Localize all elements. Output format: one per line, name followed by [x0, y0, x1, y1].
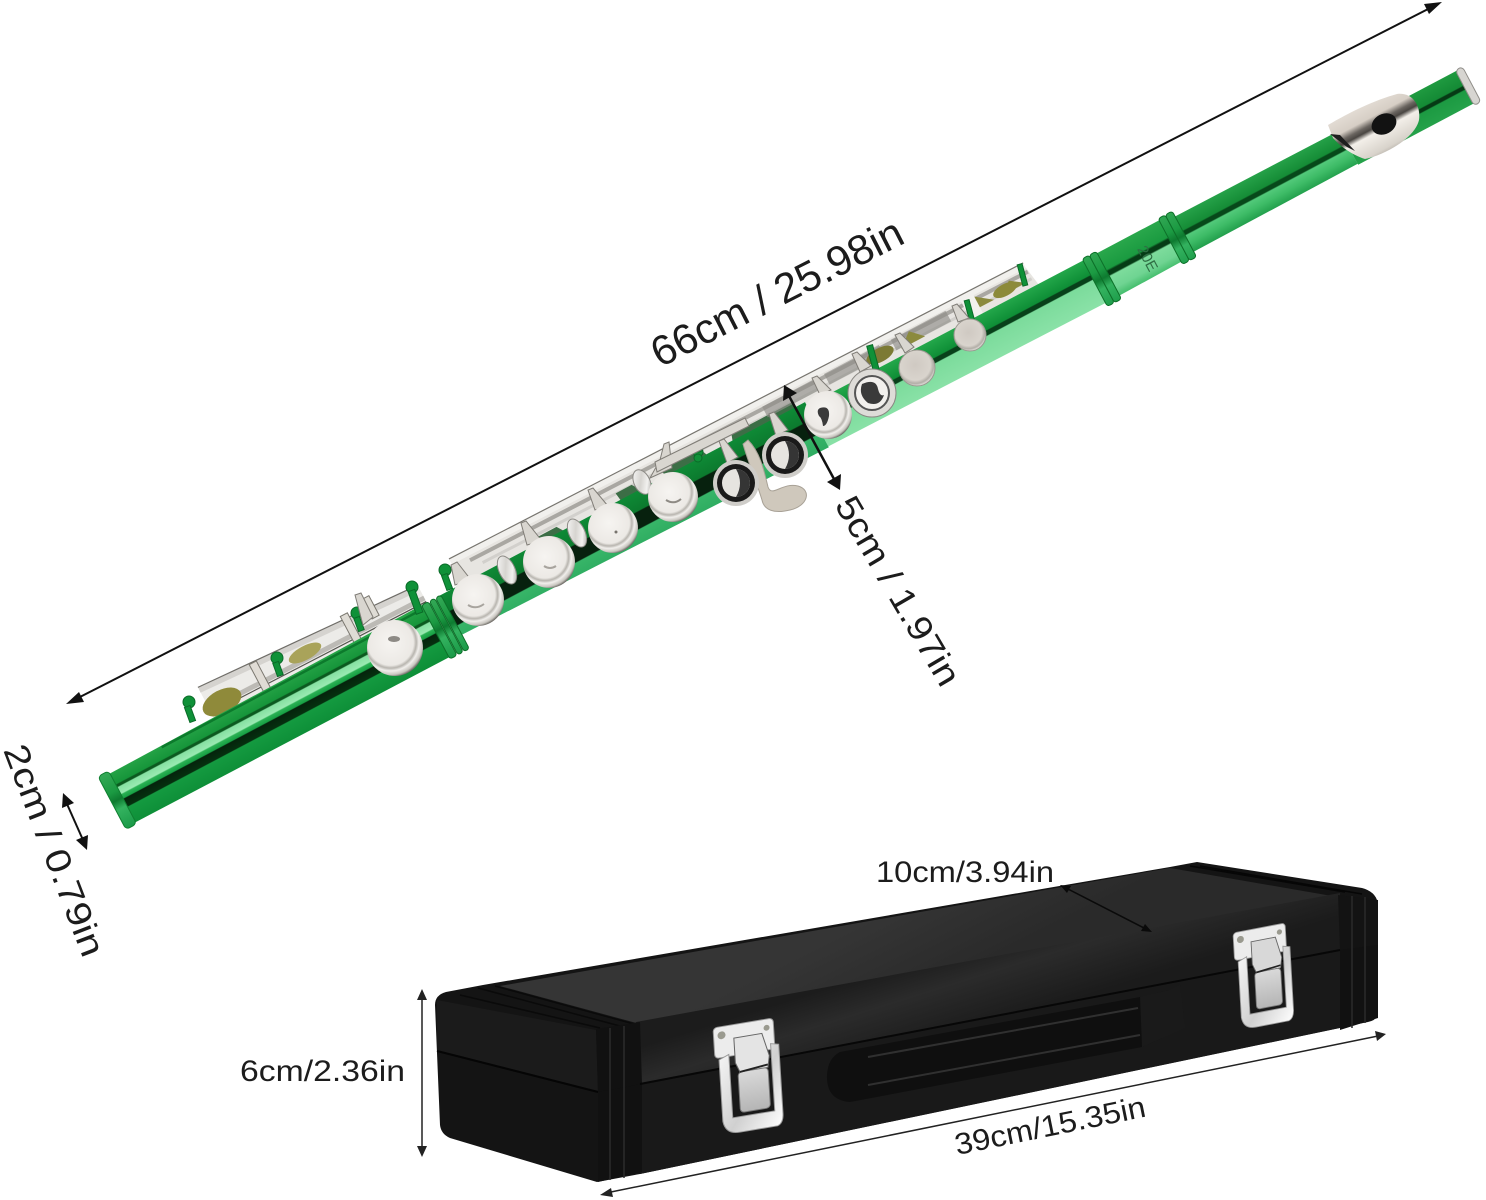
case lid side — [636, 893, 1340, 1084]
case silhouette — [435, 862, 1378, 1182]
label: case depth: 10cm/3.94in — [876, 856, 1054, 889]
right end bands — [1190, 866, 1362, 894]
ring two — [1158, 211, 1197, 265]
foot joint — [105, 602, 454, 825]
trill key 11 — [954, 319, 986, 351]
closed key 4 — [588, 503, 638, 553]
head tail — [1341, 69, 1477, 165]
foot ring — [421, 595, 469, 659]
head joint — [1167, 129, 1358, 256]
key arms — [355, 304, 969, 625]
lever key — [743, 440, 806, 512]
arrow: key width — [783, 385, 841, 490]
flute tube — [98, 57, 1486, 830]
handle — [827, 985, 1185, 1102]
green key posts — [183, 264, 1028, 723]
engraved mark: 20E — [1133, 243, 1161, 274]
flute — [98, 57, 1486, 830]
left corner strip — [596, 1022, 642, 1182]
closed key 3 — [523, 536, 575, 588]
key mechanism rods — [197, 250, 1046, 733]
left end lid — [437, 1000, 598, 1091]
middle joint, right part — [807, 258, 1108, 449]
left end seam — [437, 1051, 598, 1092]
joint section — [1095, 219, 1183, 297]
case — [435, 862, 1378, 1182]
arrow: tube diameter — [62, 793, 88, 850]
label: case length: 39cm/15.35in — [952, 1091, 1149, 1162]
case top face — [500, 868, 1332, 1024]
trill key 10 — [899, 350, 935, 386]
open key 6 — [713, 460, 759, 506]
case front seam — [640, 950, 1340, 1084]
middle joint, left part — [438, 402, 829, 641]
lip plate — [1328, 94, 1419, 159]
arrow: flute length — [66, 2, 1442, 704]
small oval keys — [493, 467, 655, 587]
label: key width: 5cm / 1.97in — [827, 489, 968, 693]
closed key 2 — [452, 574, 504, 626]
closed key 5 — [648, 472, 698, 522]
arrow: case height — [417, 989, 427, 1157]
right corner strip — [1338, 895, 1378, 1030]
case base side — [640, 950, 1340, 1174]
right latch — [1233, 922, 1294, 1030]
open key 9 — [848, 369, 896, 417]
foot rail — [162, 612, 418, 747]
pads — [198, 279, 1019, 722]
arrow: case length — [600, 1031, 1386, 1197]
end cap — [98, 771, 137, 830]
open key 8 — [804, 391, 852, 439]
label: flute length: 66cm / 25.98in — [643, 208, 911, 376]
left latch — [713, 1017, 784, 1136]
label: case height: 6cm/2.36in — [240, 1055, 405, 1088]
silver end crown — [1455, 67, 1481, 106]
left end top bands — [460, 986, 634, 1028]
arrow: case depth — [1060, 885, 1152, 932]
closed key 1 — [367, 620, 423, 676]
open key 7 — [762, 432, 808, 478]
ring one — [1082, 251, 1122, 307]
